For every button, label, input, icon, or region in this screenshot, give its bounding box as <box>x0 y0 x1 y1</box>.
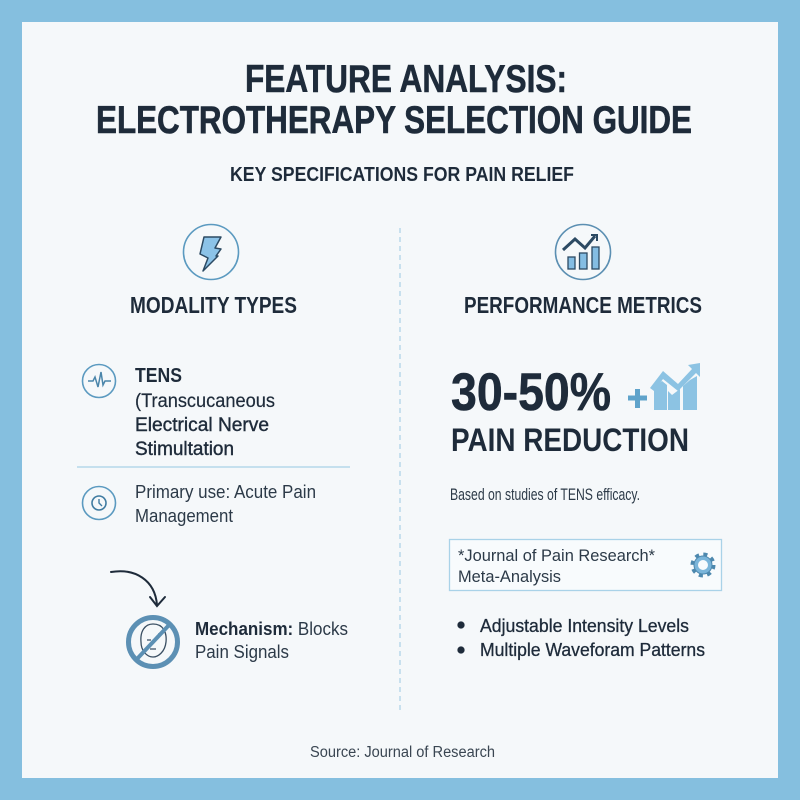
text: TENS description <box>135 365 275 460</box>
icon: plus <box>628 389 647 408</box>
text: TENS description: (Transcucaneous <box>135 391 275 412</box>
title: FEATURE ANALYSIS: <box>245 58 567 101</box>
icon: lightning bolt <box>184 224 238 280</box>
icon: waveform <box>82 364 116 398</box>
text: mechanism: Mechanism: Blocks <box>195 618 348 639</box>
text: mechanism <box>195 618 348 662</box>
icon: rising chart <box>650 363 700 410</box>
text: TENS description: TENS <box>135 365 182 387</box>
text: based on studies: Based on studies of TENS efficacy. <box>450 485 640 504</box>
callout: source box: *Journal of Pain Research* <box>458 546 655 565</box>
list: features: Multiple Waveforam Patterns <box>480 640 705 660</box>
icon: clock <box>82 486 116 520</box>
callout: source box: Meta-Analysis <box>458 567 561 586</box>
text: primary use: Management <box>135 505 233 526</box>
footer: source: Source: Journal of Research <box>310 744 495 761</box>
heading: modality types: MODALITY TYPES <box>130 292 297 318</box>
list: features <box>458 616 705 660</box>
text: TENS description: Stimultation <box>135 439 234 460</box>
list: features: Adjustable Intensity Levels <box>480 616 689 636</box>
subtitle: KEY SPECIFICATIONS FOR PAIN RELIEF <box>230 164 574 186</box>
text: primary use <box>135 481 316 526</box>
icon: gear <box>692 554 714 576</box>
icon: blocked pain face <box>128 618 178 666</box>
panel: modality types <box>77 224 350 666</box>
title <box>96 58 692 142</box>
text: mechanism: Pain Signals <box>195 641 289 662</box>
heading: performance metrics: PERFORMANCE METRICS <box>464 292 702 318</box>
text: TENS description: Electrical Nerve <box>135 415 269 436</box>
callout: source box <box>450 540 722 590</box>
arrow <box>111 571 165 606</box>
panel: performance metrics <box>450 224 722 660</box>
icon: chart in circle <box>556 224 610 280</box>
stat: 30-50%: 30-50% <box>451 363 611 422</box>
text: primary use: Primary use: Acute Pain <box>135 481 316 502</box>
label: pain reduction: PAIN REDUCTION <box>451 422 689 458</box>
